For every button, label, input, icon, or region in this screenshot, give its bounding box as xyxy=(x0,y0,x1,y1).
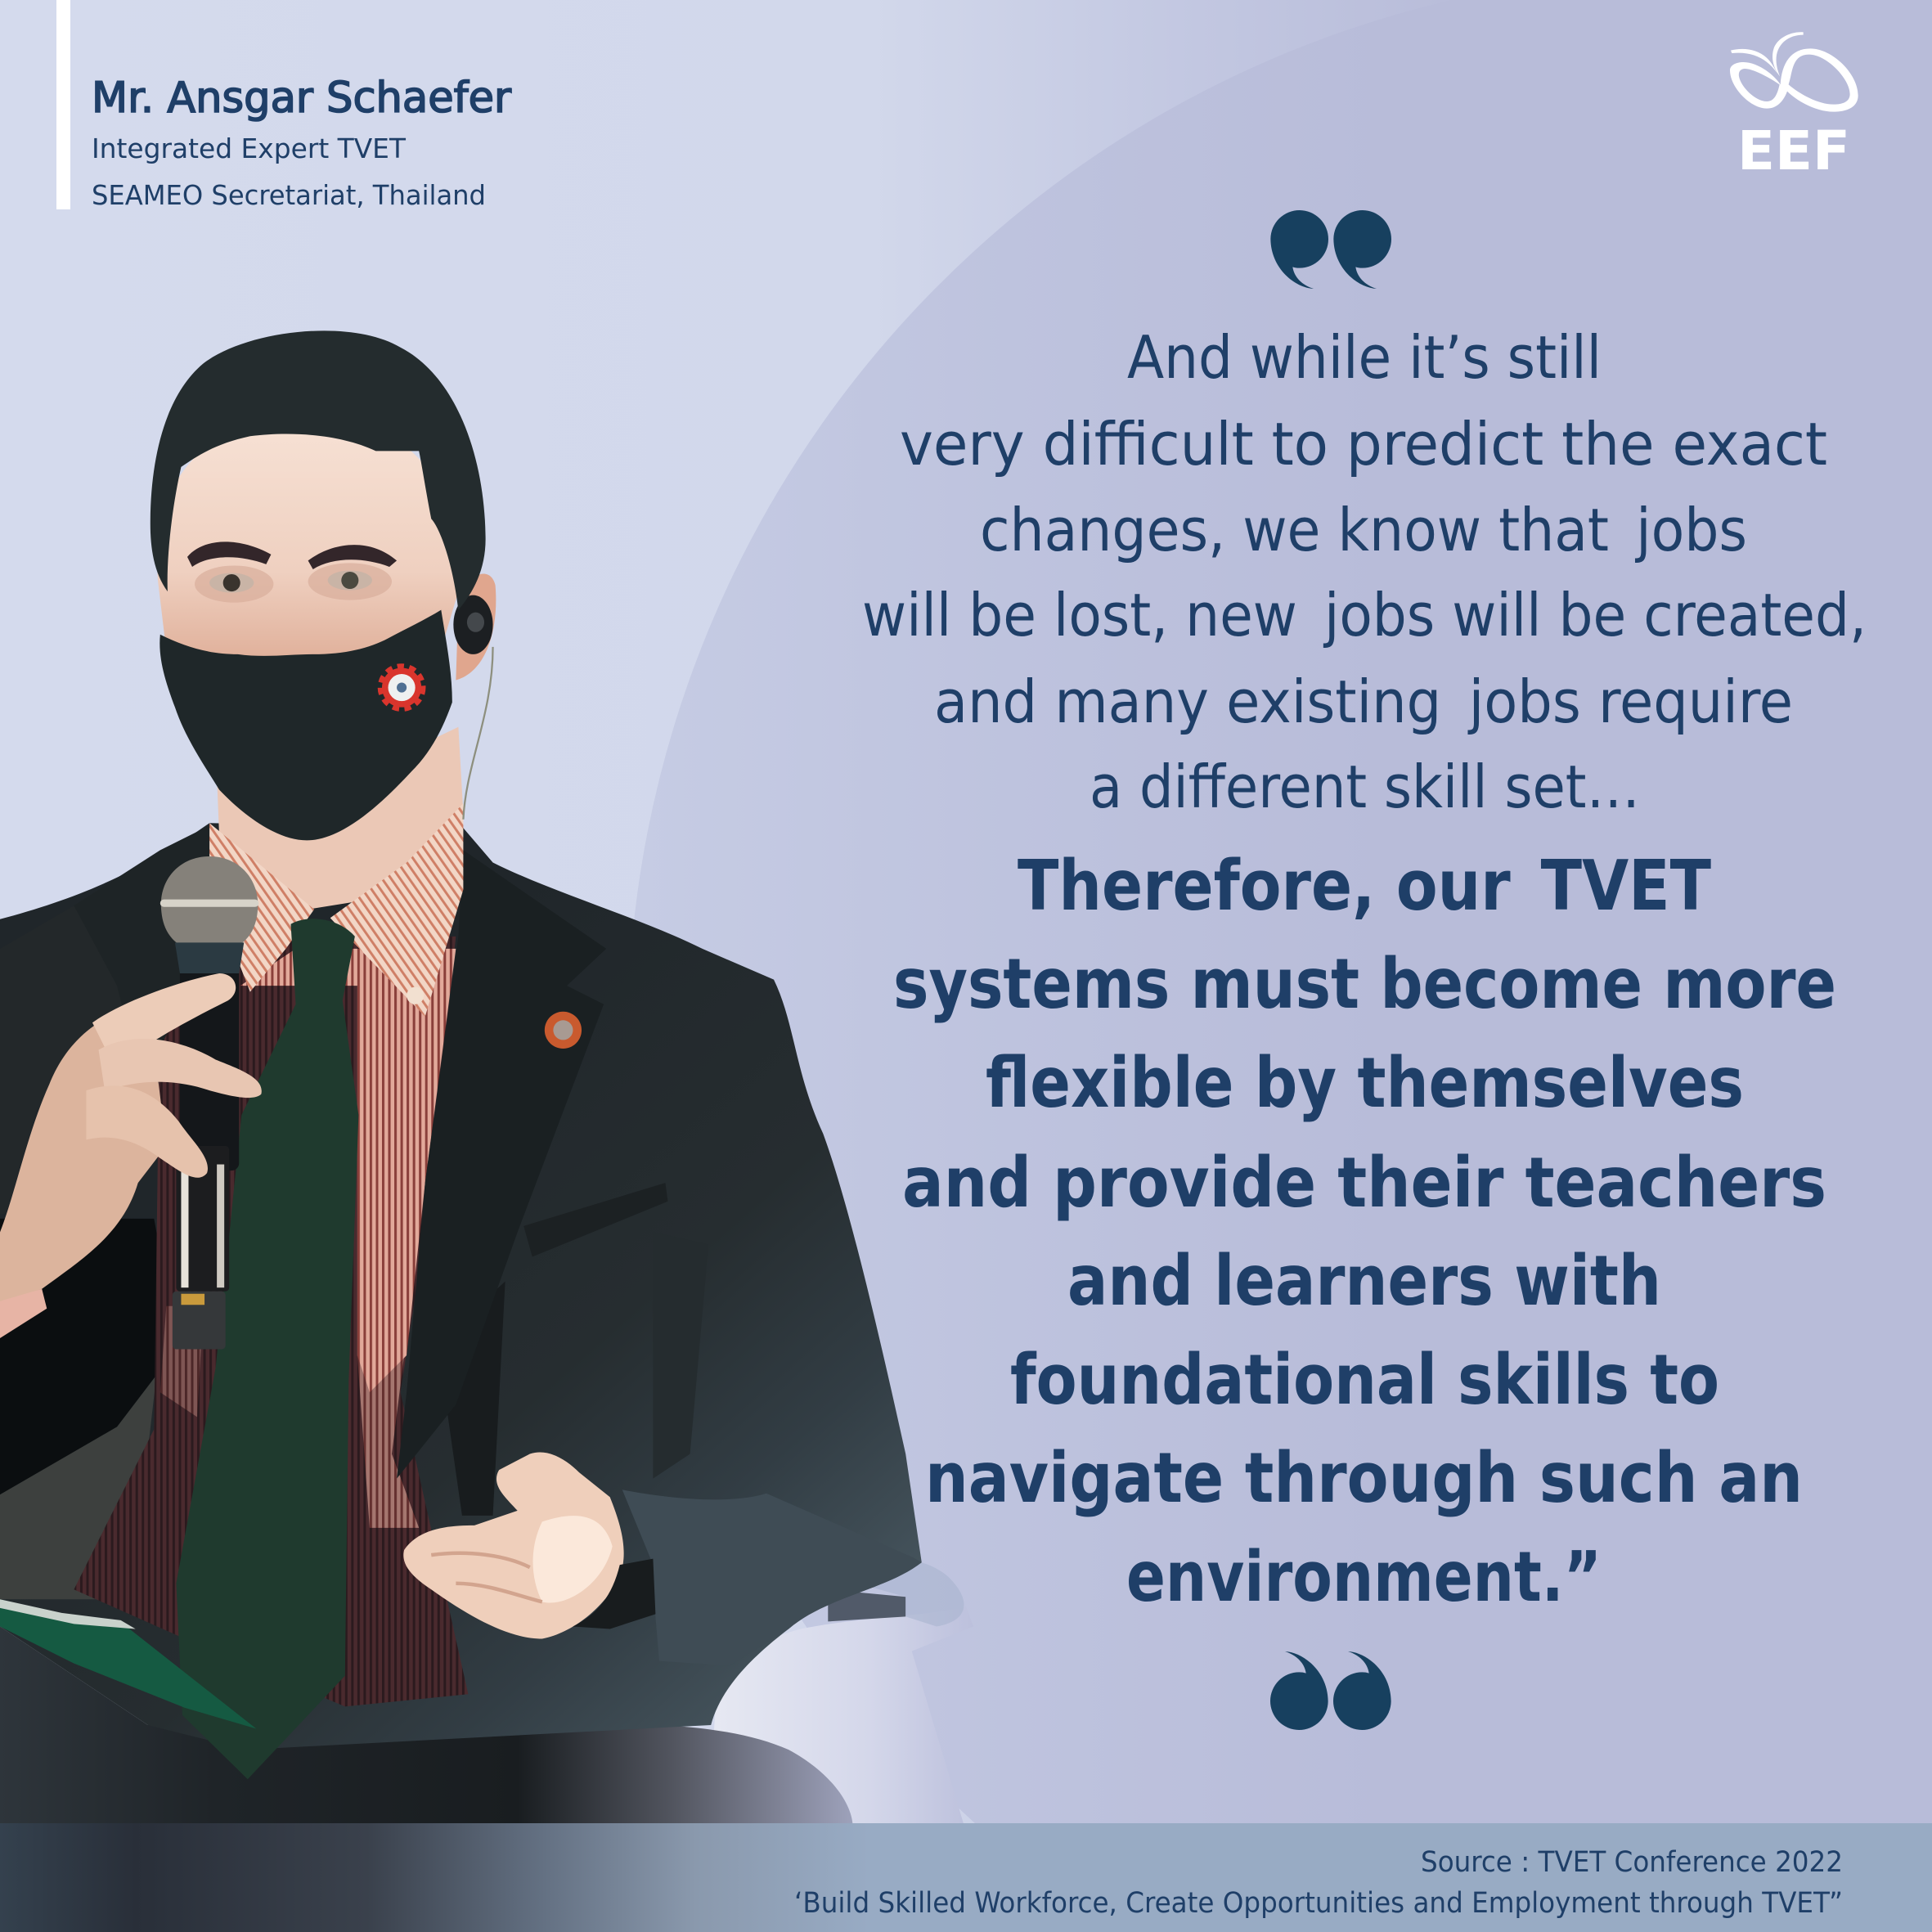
EEF logo xyxy=(1730,32,1858,182)
shirt collar xyxy=(209,803,463,1017)
quote text: bold emphasis: and provide their teachers xyxy=(902,1143,1826,1224)
chair xyxy=(708,1559,973,1823)
face mask xyxy=(160,610,452,840)
quote text: regular: a different skill set… xyxy=(1090,753,1640,821)
folder xyxy=(0,1599,256,1728)
resting hand xyxy=(403,1453,655,1639)
logo wordmark: EEF xyxy=(1737,119,1850,182)
lapels xyxy=(74,825,606,1479)
background arc panel xyxy=(627,0,1932,1932)
quote text: bold emphasis: systems must become more xyxy=(893,944,1836,1025)
portrait photo: speaker holding microphone xyxy=(0,330,973,1823)
icon: butterfly xyxy=(1730,32,1858,112)
necktie xyxy=(176,919,358,1779)
quote text: regular: very difficult to predict the exact xyxy=(900,410,1827,479)
quote text: bold emphasis: and learners with xyxy=(1067,1241,1661,1322)
hair xyxy=(151,330,486,610)
role: Integrated Expert TVET xyxy=(92,133,407,164)
quote text: bold emphasis: environment.” xyxy=(1126,1537,1602,1618)
jacket shadows xyxy=(0,905,708,1599)
mask badge xyxy=(382,667,421,708)
lapel pin xyxy=(545,1012,582,1049)
microphone xyxy=(160,856,258,1350)
neck xyxy=(217,727,463,910)
speaker name and title xyxy=(92,74,512,211)
quote text: bold emphasis xyxy=(893,846,1836,1618)
jacket xyxy=(0,823,922,1750)
sleeve cuff xyxy=(622,1489,922,1666)
conference title line: ‘Build Skilled Workforce, Create Opportunities and Employment through TVET” xyxy=(794,1887,1843,1920)
hand holding microphone xyxy=(0,973,262,1338)
quote text: bold emphasis: navigate through such an xyxy=(925,1438,1803,1519)
quote text: regular: and many existing jobs require xyxy=(934,667,1793,736)
quote text: bold emphasis: flexible by themselves xyxy=(986,1043,1744,1124)
white accent bar xyxy=(56,0,70,209)
face xyxy=(157,413,459,690)
organisation: SEAMEO Secretariat, Thailand xyxy=(92,179,486,211)
quote text: regular xyxy=(862,323,1867,821)
quote text: bold emphasis: Therefore, our TVET xyxy=(1018,846,1711,927)
shirt xyxy=(74,937,468,1706)
quote text: regular: changes, we know that jobs xyxy=(980,496,1747,564)
source line: Source : TVET Conference 2022 xyxy=(1421,1846,1843,1879)
quote text: regular: And while it’s still xyxy=(1127,323,1602,392)
eyes and eyebrows xyxy=(187,541,397,603)
quote text: bold emphasis: foundational skills to xyxy=(1010,1340,1719,1421)
trousers xyxy=(0,1626,852,1823)
quote text: regular: will be lost, new jobs will be created, xyxy=(862,581,1867,649)
speaker name: Mr. Ansgar Schaefer xyxy=(92,74,512,123)
ear and earpiece xyxy=(453,574,496,820)
icon: opening quotation mark xyxy=(1270,210,1391,289)
icon: closing quotation mark xyxy=(1270,1651,1391,1730)
source footer band xyxy=(0,1823,1932,1932)
